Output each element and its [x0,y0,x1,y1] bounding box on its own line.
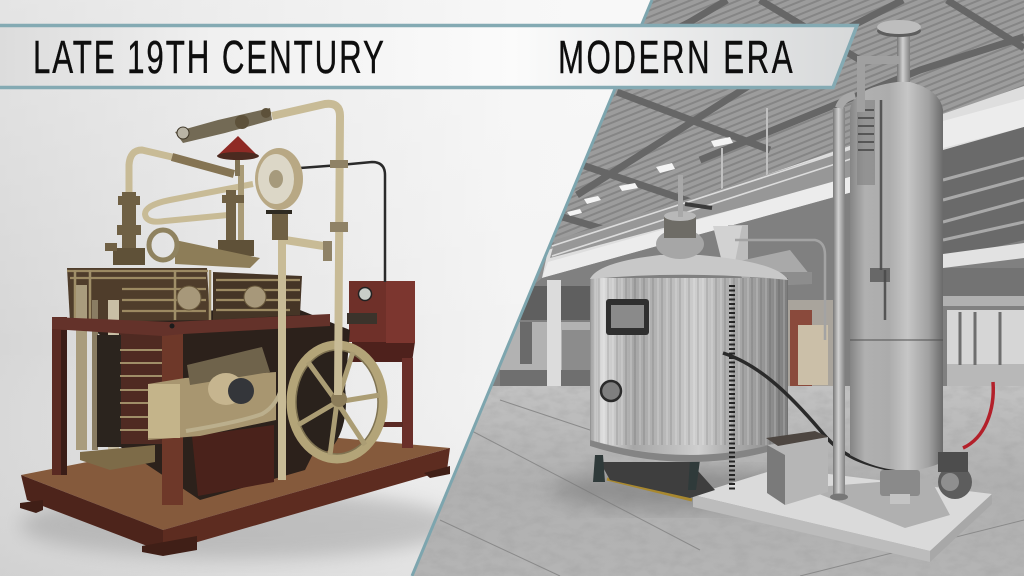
tan gearbox [148,347,282,440]
back wall of factory [493,127,1024,386]
pump unit [880,452,972,504]
main steel tank [590,175,788,462]
control box [766,431,828,505]
small gear wheel [255,148,303,240]
support pillar [547,280,561,386]
panel: modern era factory scene [400,0,1024,576]
wooden base [20,430,450,556]
chain coil [729,285,735,490]
dark angled pipe [172,157,234,174]
machine: late 19th century apparatus [20,104,450,556]
valve column left [105,192,145,265]
upper valve assembly [175,108,272,143]
round gauge [601,381,621,401]
banner [0,25,857,88]
main vertical pipes [129,104,340,480]
nameplate [606,299,649,335]
side pipe [830,60,900,500]
table and red instrument box [347,281,415,448]
diagonal teal divider [412,0,652,576]
upper plate stacks [67,268,302,325]
heading: late 19th century: LATE 19TH CENTURY [33,32,384,84]
tank legs [593,455,715,498]
rear tank and piping [713,225,825,340]
tall column [850,20,943,471]
platform slab [693,468,992,562]
wooden frame [52,314,330,505]
factory ceiling [545,0,1024,258]
red bell [217,136,259,176]
machine: modern era steel vessels [590,20,993,562]
red hose [963,382,993,448]
black hose [723,353,917,474]
black wire [300,162,385,282]
large flywheel [290,345,383,459]
brass ring gauge [149,230,177,260]
heading: modern era: MODERN ERA [558,32,793,84]
pipe couplings [323,160,348,261]
back dark works [80,306,350,500]
yellow pipe [607,479,692,500]
concrete floor [412,386,1024,576]
mezzanine walkway [542,86,1024,278]
left side rods and ribbed column [76,285,155,470]
ribbed plate stack [97,332,162,447]
brown lower cabinet [192,425,274,496]
valve column centre [175,165,260,268]
